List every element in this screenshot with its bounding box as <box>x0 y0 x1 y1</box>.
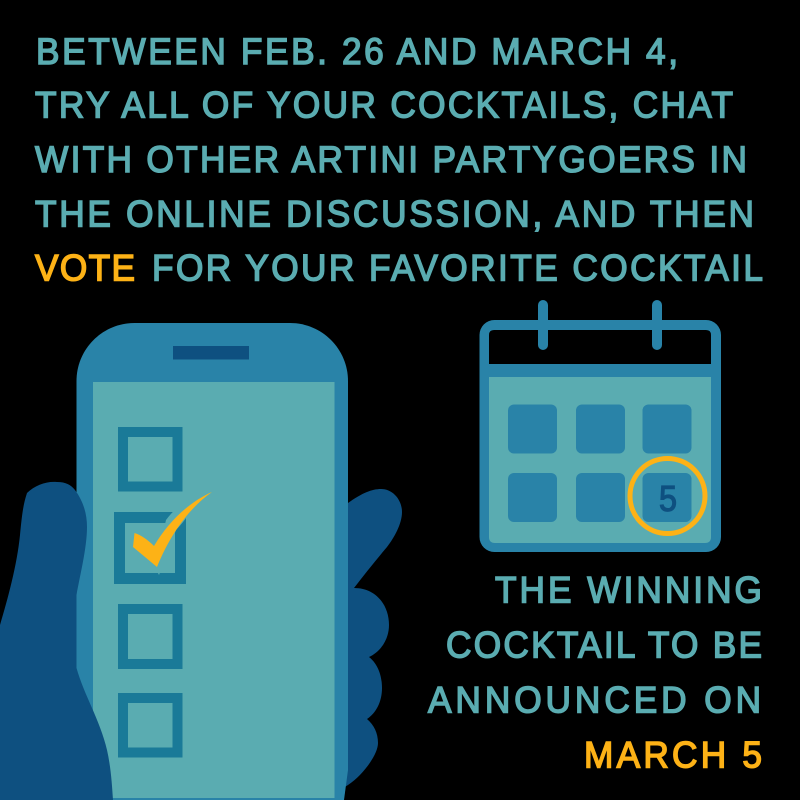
calendar ring left <box>538 300 548 350</box>
checkbox 3 <box>123 609 178 664</box>
heading: voting instructions: THE ONLINE DISCUSSION, AND THEN <box>35 192 754 235</box>
phone screen <box>93 382 334 798</box>
heading: voting instructions: FOR YOUR FAVORITE COCKTAIL <box>152 246 763 289</box>
icon: calendar <box>480 300 721 552</box>
text: winner announcement <box>428 568 762 776</box>
text: winner announcement: COCKTAIL TO BE <box>446 623 762 666</box>
calendar body <box>489 377 711 543</box>
heading: voting instructions: WITH OTHER ARTINI PARTYGOERS IN <box>35 138 747 180</box>
text: winner announcement: THE WINNING <box>495 568 762 611</box>
heading: voting instructions: VOTE <box>35 246 135 289</box>
phone speaker <box>173 346 249 360</box>
heading: voting instructions: TRY ALL OF YOUR COCKTAILS, CHAT <box>35 83 733 126</box>
left hand <box>0 482 113 800</box>
calendar header window <box>489 330 711 364</box>
check mark outline <box>155 496 196 575</box>
calendar frame <box>480 320 721 552</box>
text: winner announcement: MARCH 5 <box>584 733 762 776</box>
checkbox 2 <box>120 518 180 578</box>
date highlight circle <box>630 458 705 534</box>
check mark <box>133 492 212 567</box>
illustration: hand holding phone <box>0 323 402 800</box>
calendar day cells <box>508 404 692 522</box>
checkbox 1 <box>123 432 178 486</box>
text: winner announcement: ANNOUNCED ON <box>428 678 761 721</box>
checkbox 4 <box>123 698 178 752</box>
heading: voting instructions <box>35 30 763 289</box>
phone body <box>76 323 348 800</box>
calendar ring right <box>652 300 662 350</box>
date number 5: 5 <box>659 479 677 519</box>
right hand fingers <box>340 489 402 790</box>
heading: voting instructions: BETWEEN FEB. 26 AND MARCH 4, <box>36 30 678 72</box>
